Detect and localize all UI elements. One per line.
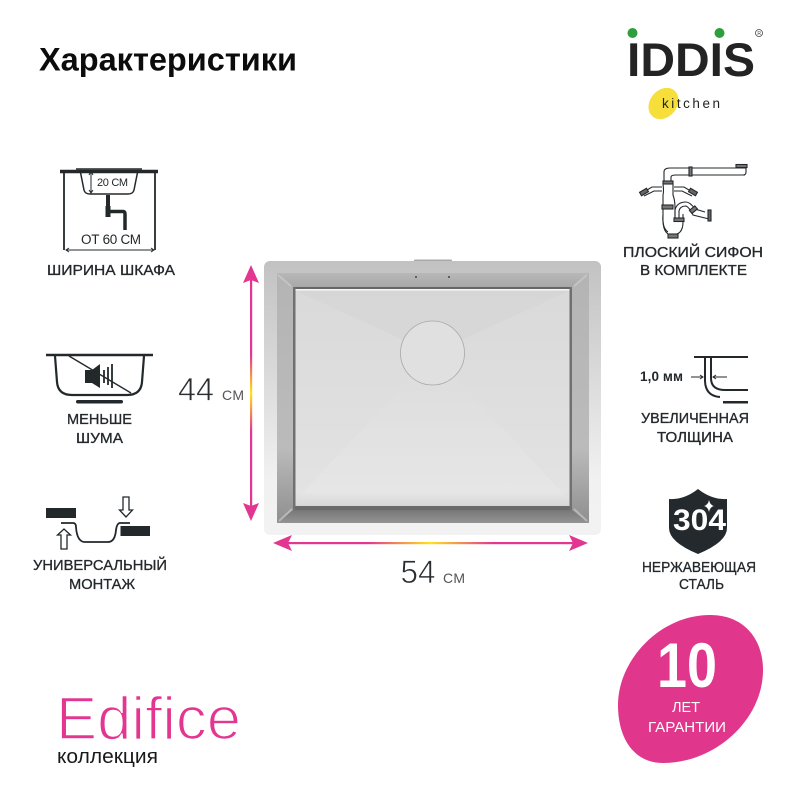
label: siphon line 2: В КОМПЛЕКТЕ [640, 263, 747, 279]
icon: siphon [640, 164, 747, 238]
icon: thickness: 1,0 мм [640, 369, 683, 384]
logo: IDDIS kitchen: R [757, 31, 761, 37]
sink floor [293, 287, 572, 510]
collection caption: коллекция [57, 746, 158, 768]
label: 54 cm [400, 554, 465, 590]
icon: 304 shield: 304 [673, 504, 726, 537]
sink [264, 260, 601, 535]
label: thickness line 2: ТОЛЩИНА [657, 430, 733, 446]
logo: IDDIS kitchen: IDDIS [627, 33, 755, 86]
badge: 10 year warranty: ЛЕТ [672, 700, 700, 716]
label: steel line 2: СТАЛЬ [679, 577, 724, 593]
label: 44 cm: СМ [222, 387, 244, 403]
icon: thickness [640, 357, 748, 404]
sink holes [415, 276, 417, 278]
icon: 304 shield [669, 489, 727, 554]
label: 44 cm: 44 [178, 372, 214, 408]
label: siphon: ПЛОСКИЙ СИФОН [623, 243, 763, 261]
label: universal mounting line 2: МОНТАЖ [69, 577, 136, 593]
logo: IDDIS kitchen: kitchen [662, 96, 720, 111]
height arrow [243, 265, 259, 521]
label: 54 cm: 54 [400, 554, 436, 590]
label: universal mounting: УНИВЕРСАЛЬНЫЙ [33, 556, 167, 574]
icon: universal mounting [46, 497, 150, 549]
label: thickness: УВЕЛИЧЕННАЯ [641, 411, 749, 427]
sink tap plate [414, 260, 452, 264]
label: 44 cm [178, 372, 244, 408]
icon: cabinet width [60, 169, 158, 252]
badge: 10 year warranty [618, 615, 763, 763]
label: less noise line 2: ШУМА [76, 431, 123, 447]
label: cabinet width: ШИРИНА ШКАФА [47, 263, 175, 279]
icon: cabinet width: 20 СМ [97, 177, 128, 189]
logo: IDDIS kitchen [627, 28, 762, 125]
icon: less noise [46, 355, 153, 404]
collection name: Edifice [56, 685, 241, 752]
sink rim [264, 261, 601, 535]
title: Характеристики [39, 42, 297, 78]
label: less noise: МЕНЬШЕ [67, 412, 132, 428]
badge: 10 year warranty: ГАРАНТИИ [648, 719, 726, 736]
label: 54 cm: СМ [443, 570, 465, 586]
sink well walls [277, 273, 589, 523]
badge: 10 year warranty: 10 [657, 631, 717, 701]
icon: cabinet width: ОТ 60 СМ [81, 232, 141, 247]
label: steel: НЕРЖАВЕЮЩАЯ [642, 560, 756, 576]
drain [400, 321, 464, 385]
width arrow [273, 535, 588, 551]
